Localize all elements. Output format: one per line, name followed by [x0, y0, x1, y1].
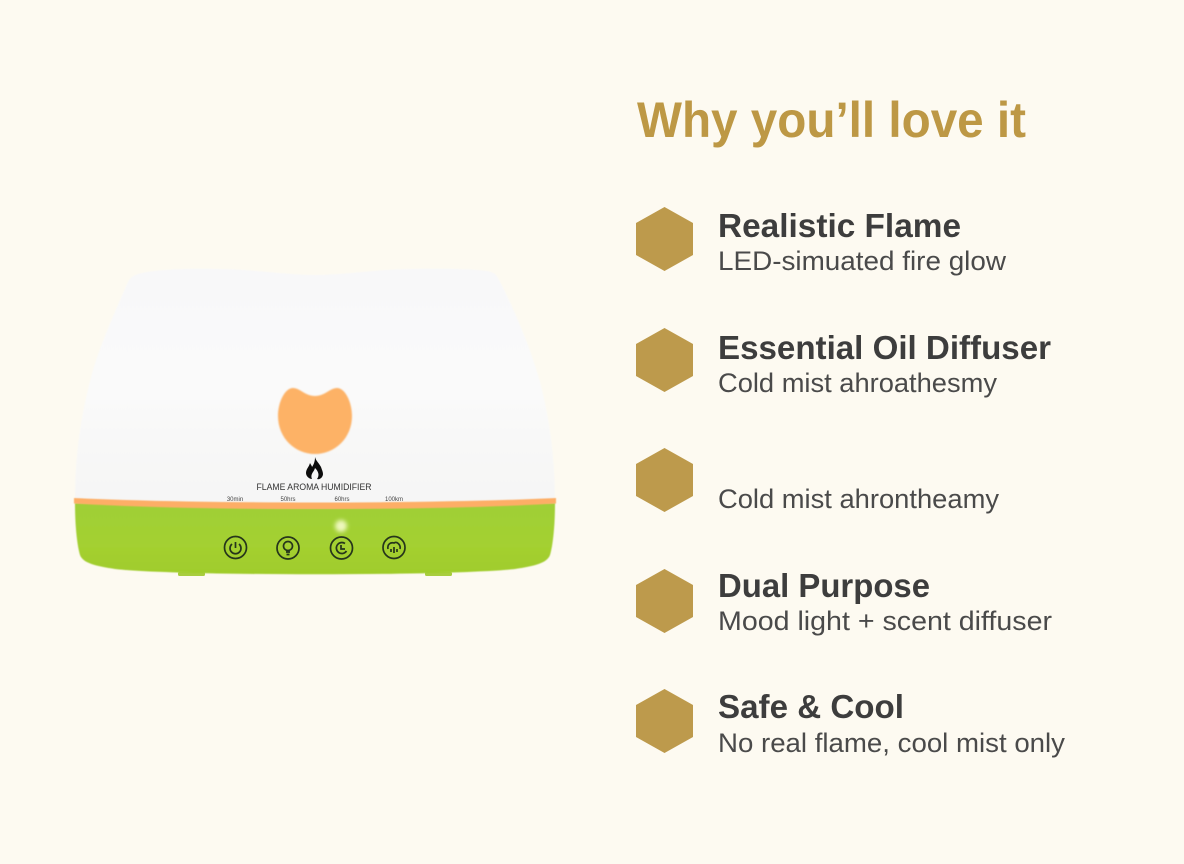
- description: Cold mist ahroathesmy: [718, 368, 997, 398]
- diffuser green base: [75, 503, 555, 574]
- timer labels: 50hrs: [280, 497, 296, 503]
- description: Mood light + scent diffuser: [718, 606, 1052, 636]
- diffuser white shell: [75, 269, 555, 508]
- description: Cold mist ahrontheamy: [718, 484, 1000, 514]
- hexagon icon: [636, 328, 693, 392]
- description: LED-simuated fire glow: [718, 246, 1007, 276]
- feature: dual purpose: [636, 567, 1052, 636]
- timer labels: 100km: [385, 497, 403, 503]
- timer labels: [227, 497, 403, 503]
- timer labels: 60hrs: [334, 497, 350, 503]
- feature: essential oil diffuser: [636, 328, 1051, 398]
- feature: safe and cool: [636, 688, 1066, 758]
- button: timer: [330, 537, 352, 559]
- timer labels: 30min: [227, 497, 243, 503]
- hexagon icon: [636, 689, 693, 753]
- product name: FLAME AROMA HUMIDIFIER: [256, 482, 372, 493]
- heading: Safe & Cool: [718, 688, 904, 725]
- hexagon icon: [636, 448, 693, 512]
- description: No real flame, cool mist only: [718, 728, 1066, 758]
- diffuser feet: [178, 572, 452, 576]
- hexagon icon: [636, 569, 693, 633]
- button: mist: [383, 536, 405, 558]
- button: light bulb: [277, 537, 299, 559]
- orange light band: [74, 498, 556, 509]
- flame logo icon: [306, 457, 323, 479]
- title: Why you’ll love it: [637, 92, 1026, 148]
- feature: cold mist: [636, 448, 1000, 514]
- heading: Essential Oil Diffuser: [718, 329, 1051, 366]
- orange flame window: [278, 388, 352, 454]
- indicator light: [335, 520, 347, 532]
- button: power: [224, 536, 246, 558]
- product: flame aroma humidifier: [74, 269, 556, 576]
- feature: realistic flame: [636, 207, 1007, 276]
- hexagon icon: [636, 207, 693, 271]
- heading: Dual Purpose: [718, 567, 930, 604]
- heading: Realistic Flame: [718, 207, 961, 244]
